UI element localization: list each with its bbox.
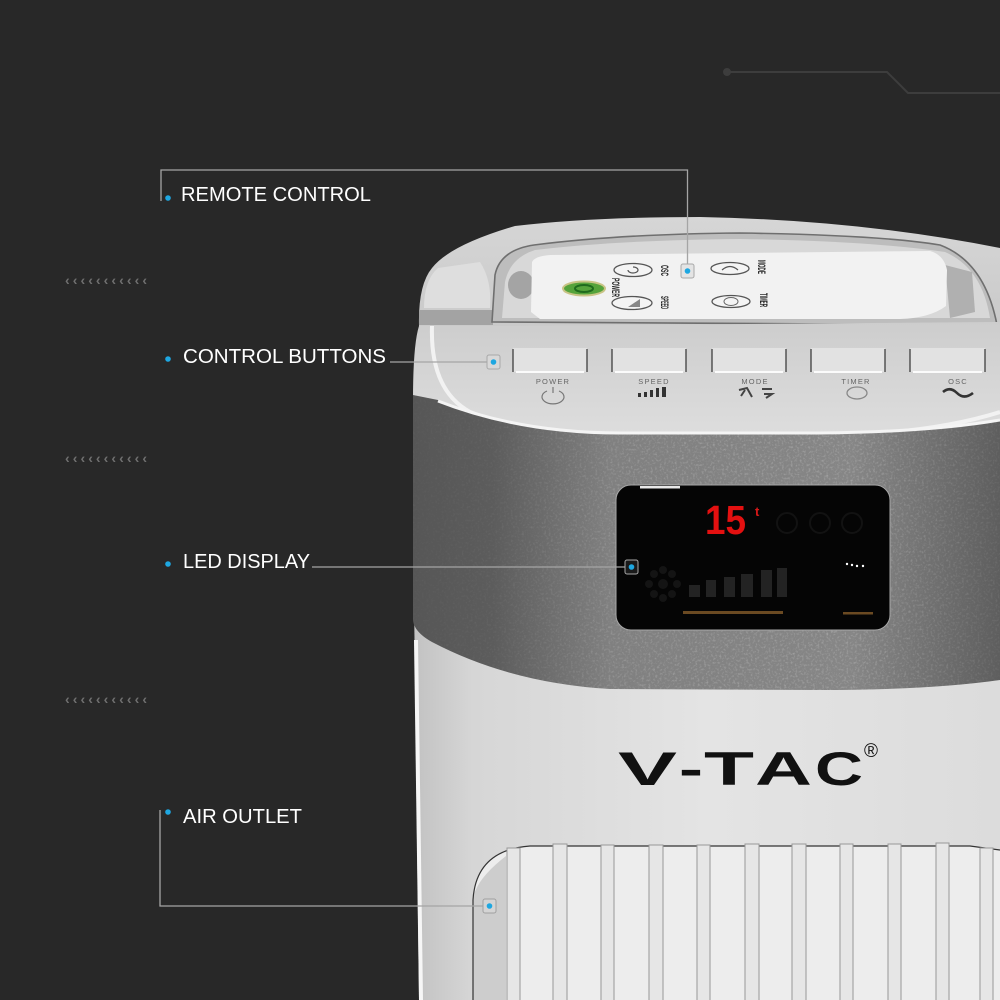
button timer bbox=[811, 348, 885, 372]
label: LED DISPLAY bbox=[183, 551, 310, 573]
degree unit: t bbox=[755, 504, 760, 519]
V-TAC logo: C bbox=[815, 742, 863, 795]
button mode bbox=[712, 348, 786, 372]
control button labels: MODE bbox=[741, 377, 769, 386]
chevron row 2: ‹‹‹‹‹‹‹‹‹‹‹ bbox=[65, 450, 147, 466]
callout: air outlet bbox=[160, 806, 496, 913]
amber strips bbox=[683, 611, 783, 614]
timer button bbox=[712, 296, 750, 308]
chevron row 3: ‹‹‹‹‹‹‹‹‹‹‹ bbox=[65, 691, 147, 707]
chevron row 1: ‹‹‹‹‹‹‹‹‹‹‹ bbox=[65, 272, 147, 288]
remote control bbox=[531, 251, 947, 319]
bullet bbox=[165, 561, 171, 567]
recess inner wall bbox=[502, 239, 990, 318]
button power bbox=[513, 348, 587, 372]
speed bars bbox=[689, 568, 787, 597]
panel edge line bbox=[432, 326, 1000, 436]
remote control: SPEED bbox=[658, 296, 670, 309]
bullet bbox=[165, 356, 171, 362]
button speed bbox=[612, 348, 686, 372]
LED display bbox=[616, 485, 890, 630]
button osc bbox=[910, 348, 985, 372]
silver band bbox=[410, 390, 1000, 695]
registered mark: ® bbox=[864, 741, 878, 762]
band top highlight bbox=[438, 401, 1000, 433]
bullet bbox=[165, 195, 171, 201]
callout: remote control bbox=[161, 170, 694, 278]
icon osc bbox=[943, 389, 973, 396]
grille ribs bbox=[507, 843, 993, 1000]
remote right clip bbox=[945, 265, 975, 318]
remote left notch bbox=[508, 271, 534, 299]
white dots bbox=[846, 563, 864, 567]
control button labels: SPEED bbox=[638, 377, 670, 386]
body left edge highlight bbox=[416, 640, 421, 1000]
V-TAC logo bbox=[618, 741, 878, 795]
reflection bbox=[640, 486, 680, 488]
callout: LED display bbox=[165, 551, 638, 574]
label: CONTROL BUTTONS bbox=[183, 346, 386, 368]
label: REMOTE CONTROL bbox=[181, 184, 371, 206]
mode button bbox=[711, 262, 749, 274]
fan white body bbox=[414, 600, 1000, 1000]
remote labels: MODE bbox=[755, 260, 767, 274]
remote control: TIMER bbox=[757, 293, 769, 307]
product: tower fan bbox=[410, 217, 1000, 1000]
osc button bbox=[614, 264, 652, 276]
remote labels: POWER bbox=[609, 278, 621, 297]
temperature reading: 15 bbox=[705, 497, 746, 543]
leader line bbox=[161, 170, 688, 264]
marker bbox=[625, 560, 638, 574]
V-TAC logo: - bbox=[679, 742, 703, 795]
icon power bbox=[542, 387, 564, 404]
control buttons row bbox=[513, 348, 985, 372]
icon mode bbox=[739, 388, 772, 398]
remote labels bbox=[609, 260, 769, 309]
shell reflection bbox=[424, 262, 490, 308]
shell sparkle corner bbox=[419, 310, 493, 325]
decorative circuit line bbox=[724, 69, 1000, 93]
speed button bbox=[612, 296, 652, 310]
icon timer bbox=[847, 387, 867, 399]
control button labels: OSC bbox=[948, 377, 968, 386]
control panel bbox=[413, 322, 1000, 440]
control button icons bbox=[542, 387, 973, 404]
air outlet grille bbox=[473, 843, 1000, 1000]
remote labels: OSC bbox=[658, 265, 670, 276]
V-TAC logo: A bbox=[755, 742, 812, 795]
control button labels: POWER bbox=[536, 377, 570, 386]
leader line bbox=[390, 361, 487, 363]
power button bbox=[563, 282, 605, 296]
callout: control buttons bbox=[165, 346, 500, 369]
control button labels: TIMER bbox=[841, 377, 871, 386]
marker bbox=[487, 355, 500, 369]
leader line bbox=[160, 810, 483, 906]
control button labels bbox=[536, 377, 968, 386]
bullet bbox=[165, 809, 171, 815]
label: AIR OUTLET bbox=[183, 806, 302, 828]
icon speed bars bbox=[638, 387, 666, 397]
top shell bbox=[419, 217, 1000, 340]
leader line bbox=[312, 566, 625, 568]
V-TAC logo: T bbox=[704, 742, 754, 795]
unlit icons bbox=[777, 513, 862, 533]
V-TAC logo: V bbox=[618, 742, 678, 795]
marker bbox=[681, 264, 694, 278]
marker bbox=[483, 899, 496, 913]
fan icon bbox=[645, 566, 681, 602]
remote recess bbox=[492, 233, 997, 325]
